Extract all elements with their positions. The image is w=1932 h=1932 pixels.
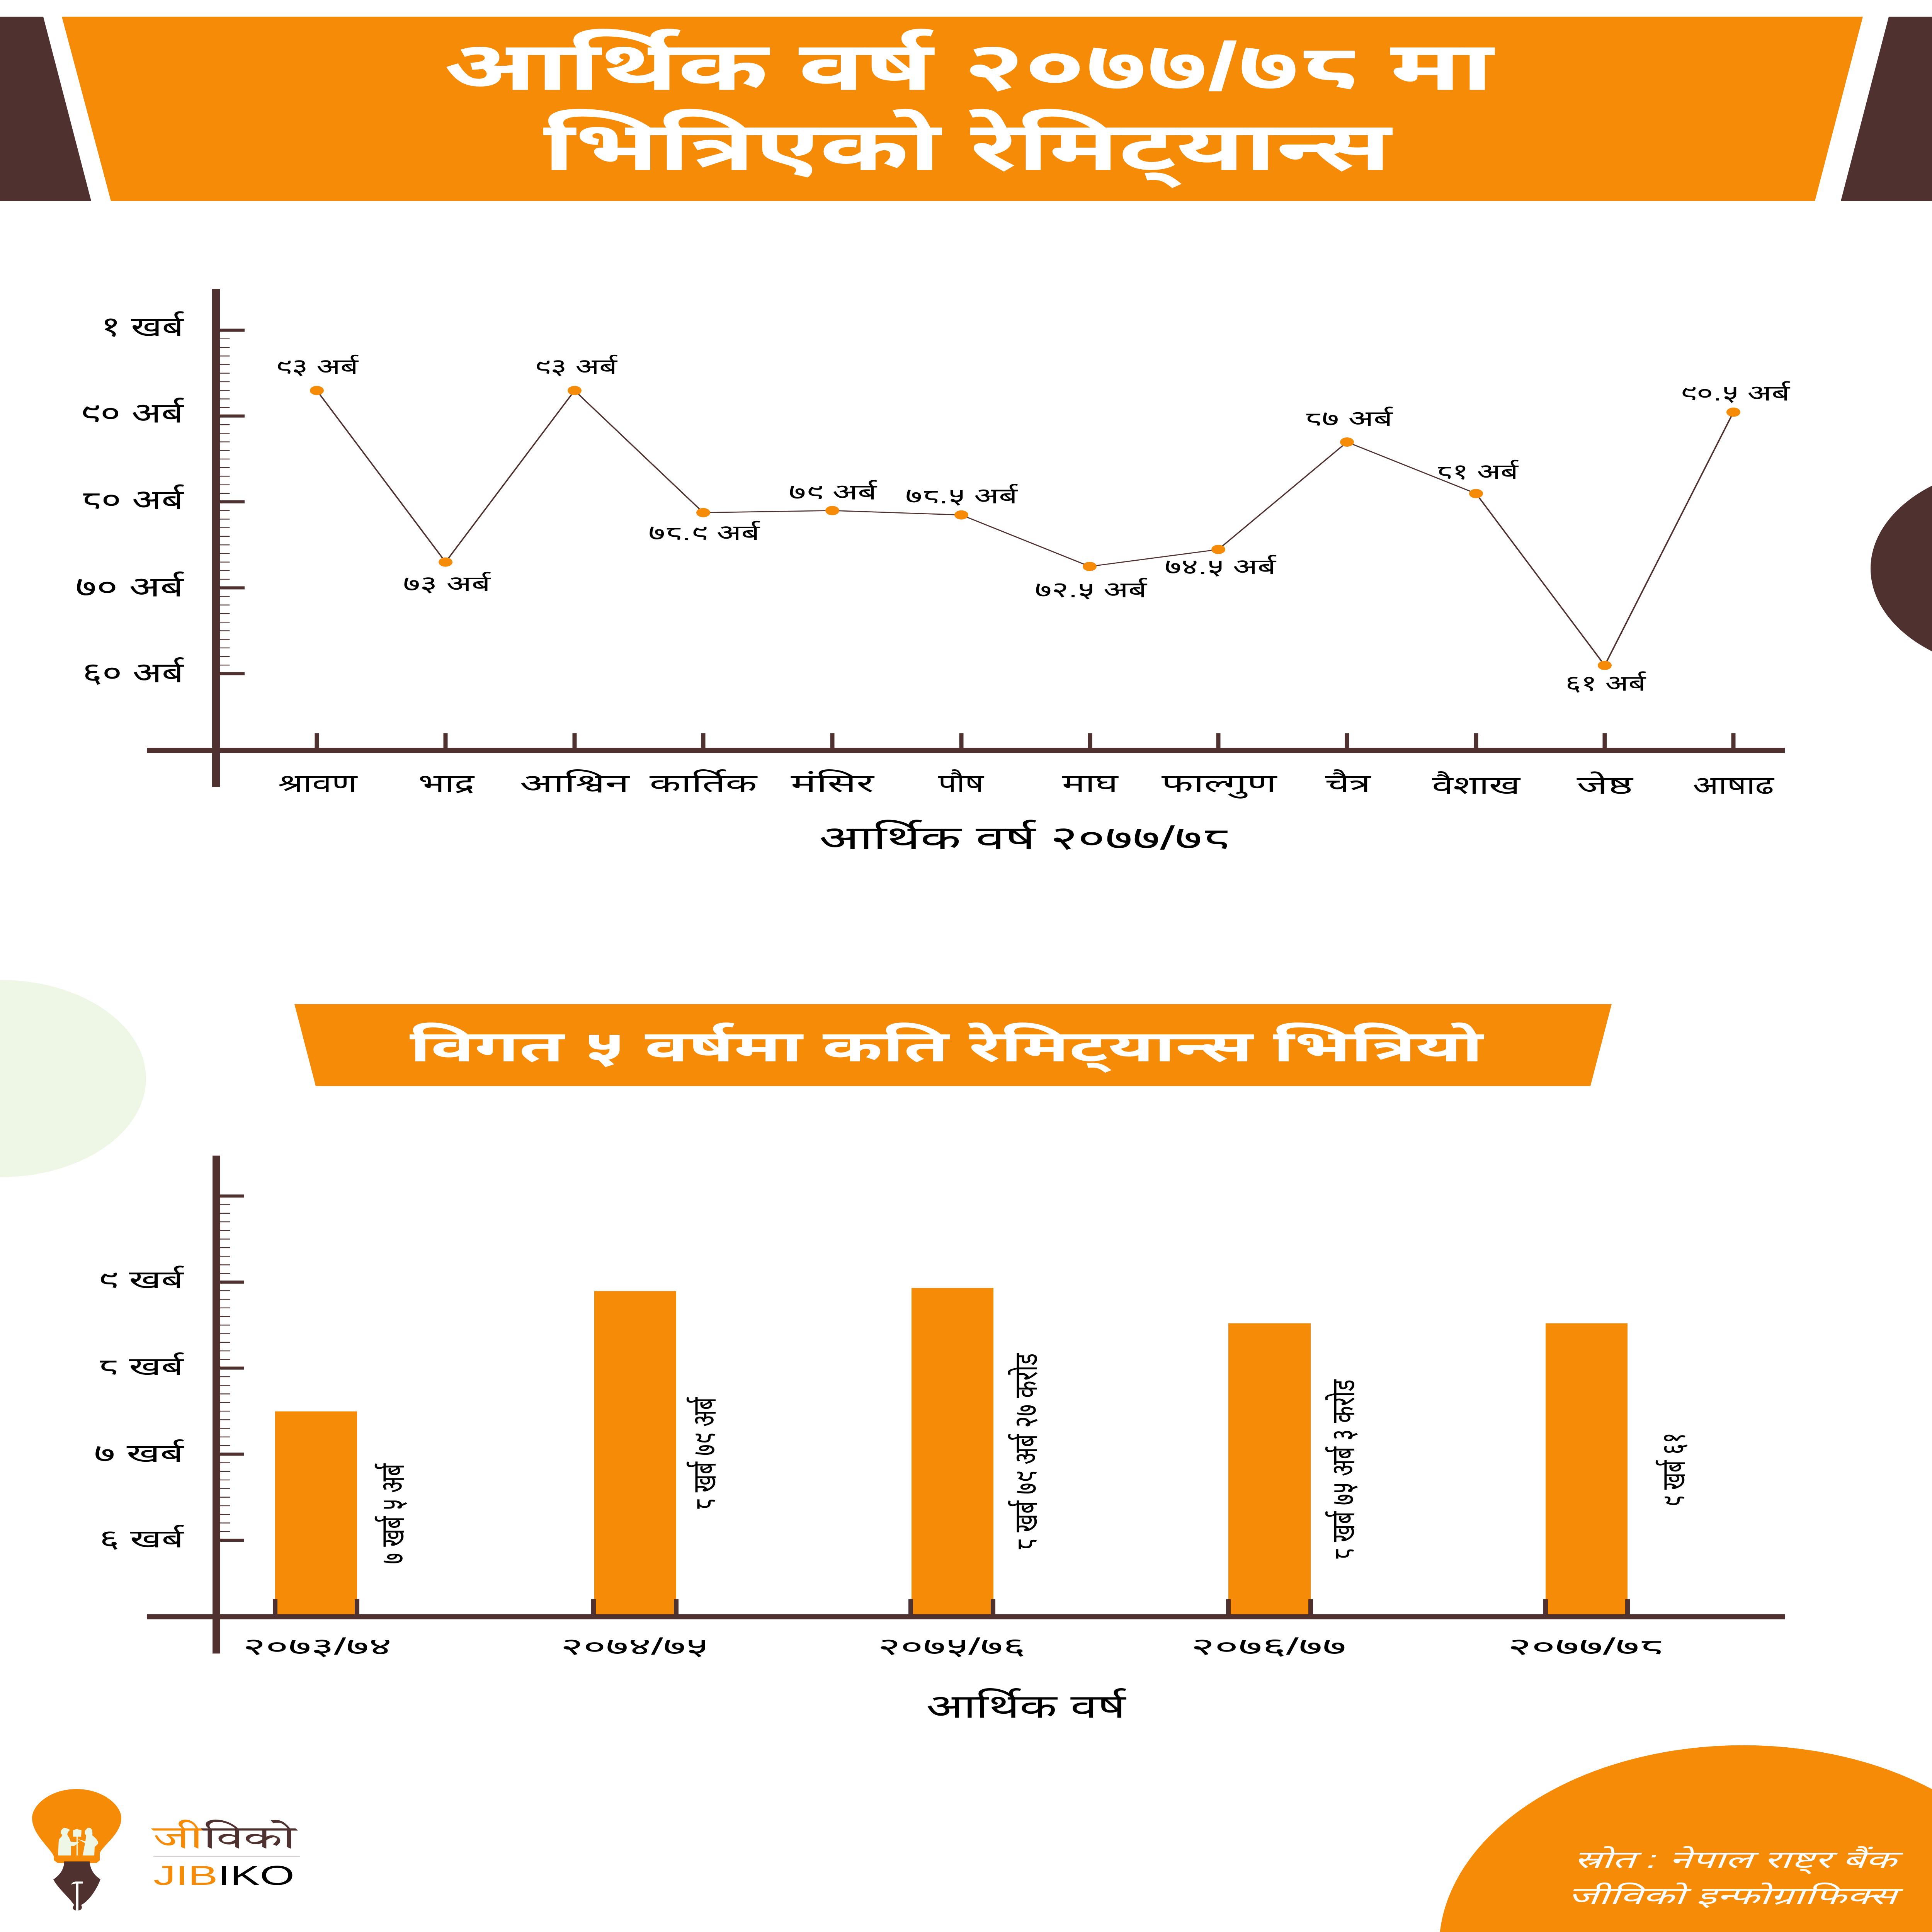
y axis labels: ९० अर्ब [80,397,184,429]
rotated value labels: ७ खर्ब ५ अर्ब [375,1463,411,1564]
credit line: जीविको इन्फोग्राफिक्स [1568,1883,1904,1909]
year labels: २०७६/७७ [1191,1633,1346,1660]
y axis minor ticks bar chart [216,1196,230,1540]
month labels: भाद्र [418,769,475,797]
data value labels: ७८.९ अर्ब [648,521,760,545]
logo wordmark devanagari: जीविको [151,1820,298,1855]
x axis bar chart [147,1614,1785,1619]
month labels: कार्तिक [650,769,758,797]
y axis labels bar chart [94,1265,184,1553]
month labels: मंसिर [791,769,875,797]
orange heading band [294,1004,1612,1086]
month labels [278,769,1775,799]
data points [310,386,1740,670]
year labels [243,1633,1663,1660]
data value labels [276,355,1790,696]
month labels: जेष्ठ [1577,771,1634,799]
data value labels: ७८.५ अर्ब [905,484,1018,508]
left dark corner [0,17,91,201]
data value labels: ९३ अर्ब [534,355,617,379]
y axis bar chart [213,1156,220,1653]
header banner [0,17,1932,201]
x axis ticks [317,733,1733,748]
rotated value labels [375,1353,1692,1564]
data value labels: ८७ अर्ब [1304,406,1393,431]
month labels: पौष [938,769,985,797]
rotated value labels: ८ खर्ब ७९ अर्ब २७ करोड [1008,1353,1044,1550]
rotated value labels: ९ खर्ब ६१ [1656,1432,1692,1507]
month labels: आषाढ [1693,771,1775,799]
data value labels: ९३ अर्ब [276,355,359,379]
x axis line chart [147,748,1785,753]
y axis labels bar chart: ८ खर्ब [98,1352,184,1381]
year labels: २०७७/७८ [1508,1633,1663,1660]
icon: bulb [32,1789,121,1863]
title line 1: आर्थिक वर्ष २०७७/७८ मा [444,28,1495,104]
data line [317,391,1733,665]
data value labels: ७९ अर्ब [789,480,877,504]
icon: hammer in nib [71,1881,83,1911]
month labels: फाल्गुण [1162,769,1277,799]
section heading banner [294,1004,1612,1086]
data value labels: ६१ अर्ब [1565,671,1646,696]
month labels: माघ [1062,769,1119,797]
data value labels: ७३ अर्ब [403,572,491,596]
orange title band [62,17,1863,201]
source line: स्रोत : नेपाल राष्ट्र बैंक [1574,1846,1903,1874]
rotated value labels: ८ खर्ब ७९ अर्ब [687,1397,723,1510]
bar chart: five year remittance [94,1156,1785,1725]
footer source block [1440,1745,1932,1932]
title line 2: भित्रिएको रेमिट्‌यान्स [543,108,1393,188]
y axis labels: ८० अर्ब [81,484,184,515]
year labels: २०७३/७४ [243,1633,391,1660]
year labels: २०७४/७५ [561,1633,708,1660]
y axis labels: ६० अर्ब [82,657,184,688]
y axis labels [75,311,184,688]
month labels: वैशाख [1432,771,1521,799]
icon: pen nib [53,1861,100,1911]
y axis line chart [212,289,220,787]
data value labels: ८१ अर्ब [1436,460,1519,484]
logo: Jibiko [32,1789,300,1911]
data value labels: ९०.५ अर्ब [1680,381,1790,405]
bar edge ticks [275,1599,1628,1615]
rotated value labels: ८ खर्ब ७५ अर्ब ३ करोड [1325,1379,1362,1560]
data value labels: ७२.५ अर्ब [1035,578,1147,602]
y axis labels bar chart: ७ खर्ब [94,1439,184,1467]
right dark corner [1841,17,1932,201]
month labels: आश्विन [520,769,630,797]
y axis minor ticks [216,330,230,673]
y axis labels: ७० अर्ब [75,571,184,602]
decorative brown circle right [1871,486,1932,651]
bars [275,1288,1628,1616]
line chart x axis title: आर्थिक वर्ष २०७७/७८ [819,820,1230,857]
year labels: २०७५/७६ [878,1633,1026,1660]
y axis labels: १ खर्ब [101,311,184,342]
orange footer circle [1440,1745,1932,1932]
y axis major ticks bar chart [216,1196,244,1540]
decorative green circle left [0,980,146,1177]
y axis labels bar chart: ६ खर्ब [99,1525,184,1553]
bar chart x axis title: आर्थिक वर्ष [926,1688,1126,1725]
heading text: विगत ५ वर्षमा कति रेमिट्‌यान्स भित्रियो [410,1022,1485,1073]
y axis labels bar chart: ९ खर्ब [98,1265,184,1294]
data value labels: ७४.५ अर्ब [1165,555,1276,579]
y axis major ticks [216,330,245,673]
logo wordmark latin: JIBIKO [153,1860,294,1891]
icon: workers silhouettes [58,1828,98,1855]
month labels: चैत्र [1325,769,1371,797]
line chart: monthly remittance [75,289,1790,857]
month labels: श्रावण [278,769,358,797]
